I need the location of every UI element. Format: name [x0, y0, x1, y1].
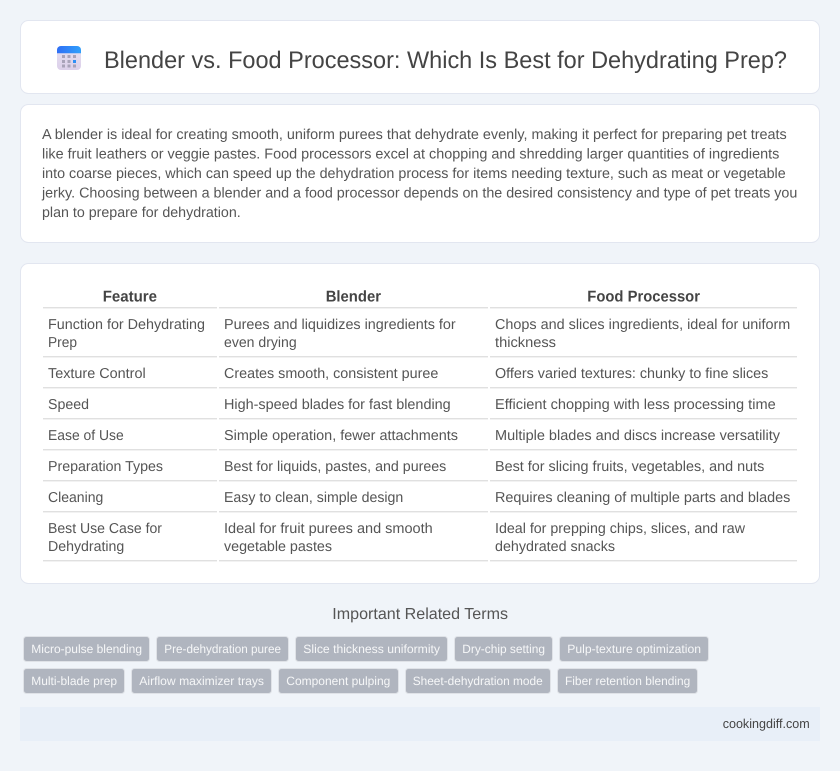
paragraph text: plan to prepare for dehydration. [42, 205, 241, 221]
row: best use case: vegetable pastes [224, 539, 332, 555]
row: preparation types: Preparation Types [48, 459, 163, 475]
tag: multi-blade prep: Multi-blade prep [31, 674, 117, 688]
tag: fiber retention blending: Fiber retention blending [565, 674, 690, 688]
row: function for dehydrating prep: Purees and liquidizes ingredients for [224, 317, 456, 333]
tag: airflow maximizer trays: Airflow maximizer trays [139, 674, 264, 688]
row: texture control: Texture Control [48, 366, 146, 382]
panel: comparison table [20, 264, 820, 584]
paragraph text [41, 127, 797, 221]
row: ease of use: Multiple blades and discs increase versatility [495, 428, 781, 444]
row: preparation types: Best for liquids, pastes, and purees [224, 459, 446, 475]
paragraph text: like fruit leathers or veggie pastes. Food processors excel at chopping and shredding larger quantities of ingredients [42, 147, 779, 163]
row: preparation types [48, 459, 764, 475]
row: function for dehydrating prep: even drying [224, 335, 297, 351]
row: best use case: dehydrated snacks [495, 539, 615, 555]
row: texture control [48, 366, 768, 382]
tag: pre-dehydration puree: Pre-dehydration puree [164, 642, 281, 656]
tag: component pulping [278, 668, 398, 694]
row: preparation types: Best for slicing fruits, vegetables, and nuts [495, 459, 764, 475]
row: speed: High-speed blades for fast blending [224, 397, 451, 413]
tag: pulp-texture optimization: Pulp-texture optimization [567, 642, 701, 656]
heading: important related terms: Important Related Terms [332, 606, 508, 623]
table header: Blender [326, 288, 381, 306]
related term tags [24, 636, 708, 694]
row: function for dehydrating prep [48, 317, 790, 351]
title panel [20, 20, 820, 94]
row: best use case: Dehydrating [48, 539, 124, 555]
row: cleaning [48, 490, 790, 506]
row: function for dehydrating prep: thickness [495, 335, 556, 351]
tag: component pulping: Component pulping [286, 674, 390, 688]
tag: micro-pulse blending [24, 636, 150, 662]
footer source text: cookingdiff.com [723, 716, 810, 731]
tag: slice thickness uniformity [296, 636, 448, 662]
row: ease of use: Simple operation, fewer attachments [224, 428, 458, 444]
table header [103, 288, 700, 306]
paragraph text: into coarse pieces, which can speed up the dehydration process for items needing texture, such as meat or vegetable [42, 166, 786, 182]
table header: Feature [103, 288, 157, 306]
icon: calendar [57, 46, 81, 70]
table header: Food Processor [587, 288, 700, 306]
row: cleaning: Cleaning [48, 490, 103, 506]
row: ease of use: Ease of Use [48, 428, 124, 444]
paragraph text: A blender is ideal for creating smooth, uniform purees that dehydrate evenly, making it perfect for preparing pet treats [42, 127, 787, 143]
row: speed [48, 397, 776, 413]
footer bar [20, 707, 820, 741]
row: speed: Speed [48, 397, 89, 413]
tag: sheet-dehydration mode: Sheet-dehydration mode [413, 674, 543, 688]
tag: airflow maximizer trays [132, 668, 272, 694]
row: best use case: Ideal for fruit purees and smooth [224, 521, 433, 537]
tag: sheet-dehydration mode [406, 668, 550, 694]
tag: slice thickness uniformity: Slice thickness uniformity [303, 642, 440, 656]
paragraph text: jerky. Choosing between a blender and a food processor depends on the desired consistency and type of pet treats you [41, 186, 797, 202]
tag: dry-chip setting: Dry-chip setting [462, 642, 545, 656]
row: ease of use [48, 428, 781, 444]
tag: micro-pulse blending: Micro-pulse blending [31, 642, 142, 656]
row: cleaning: Easy to clean, simple design [224, 490, 403, 506]
row: cleaning: Requires cleaning of multiple parts and blades [495, 490, 790, 506]
row: function for dehydrating prep: Function for Dehydrating [48, 317, 205, 333]
row: texture control: Creates smooth, consistent puree [224, 366, 438, 382]
tag: fiber retention blending [558, 668, 698, 694]
row: speed: Efficient chopping with less processing time [495, 397, 776, 413]
row: function for dehydrating prep: Chops and slices ingredients, ideal for uniform [495, 317, 790, 333]
tag: pre-dehydration puree [156, 636, 288, 662]
tag: multi-blade prep [24, 668, 124, 694]
row: best use case [48, 521, 746, 555]
row: best use case: Ideal for prepping chips, slices, and raw [495, 521, 746, 537]
tag: pulp-texture optimization [560, 636, 708, 662]
row: texture control: Offers varied textures: chunky to fine slices [495, 366, 768, 382]
row: best use case: Best Use Case for [48, 521, 162, 537]
row: function for dehydrating prep: Prep [48, 335, 77, 351]
panel: intro paragraph [20, 104, 820, 242]
tag: dry-chip setting [454, 636, 552, 662]
title text: Blender vs. Food Processor: Which Is Best for Dehydrating Prep? [104, 47, 787, 74]
